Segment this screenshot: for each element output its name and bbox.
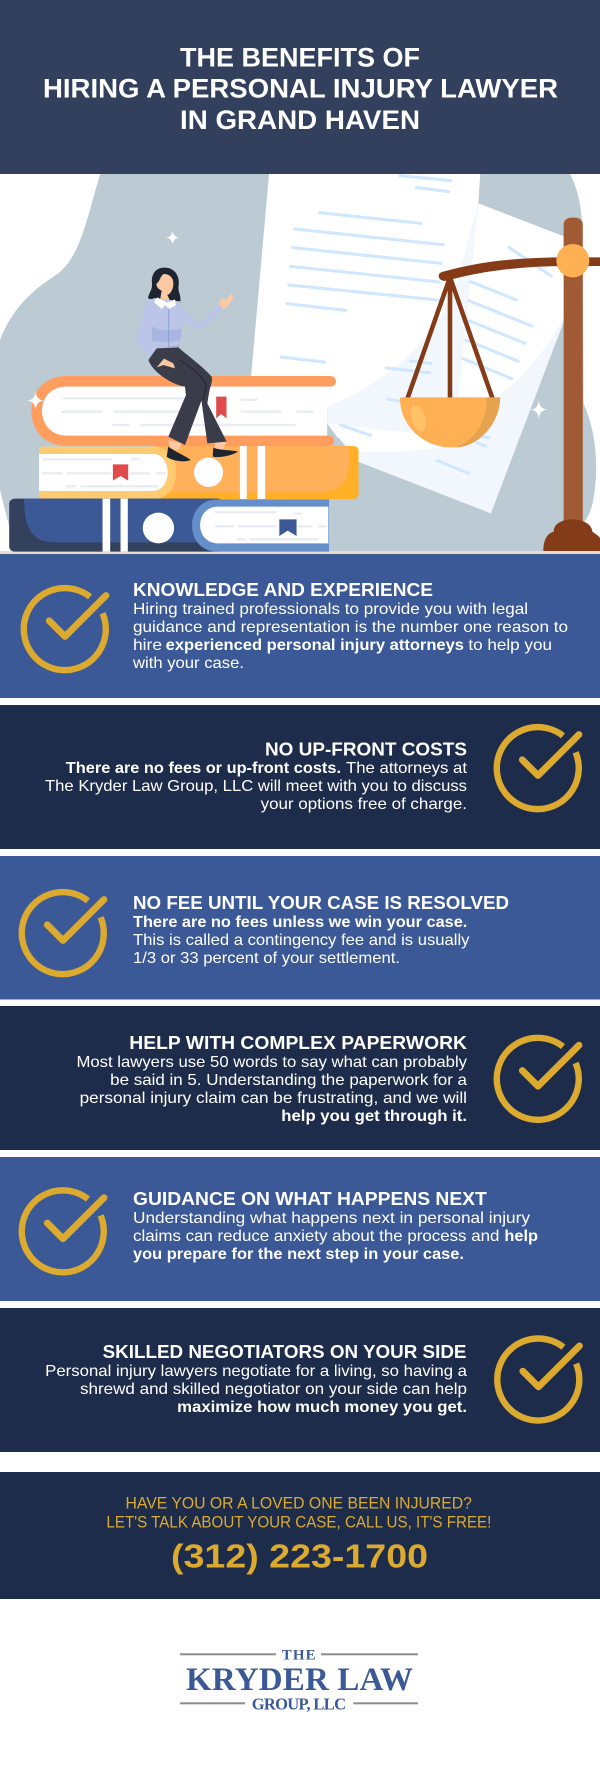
background blob bbox=[0, 174, 596, 551]
call to action text bbox=[106, 1494, 491, 1531]
body text: 1/3 or 33 percent of your settlement. bbox=[133, 950, 400, 967]
body text: claims can reduce anxiety about the process and bbox=[133, 1228, 499, 1245]
body text: you prepare for the next step in your case. bbox=[133, 1246, 464, 1263]
body text: hire bbox=[133, 637, 162, 654]
heading: KNOWLEDGE AND EXPERIENCE bbox=[133, 580, 433, 600]
logo: The Kryder Law Group, LLC: KRYDER LAW bbox=[186, 1662, 413, 1698]
panel: no fee until your case is resolved bbox=[0, 856, 600, 1000]
body text: There are no fees unless we win your case. bbox=[133, 914, 467, 931]
body text: to help you bbox=[468, 637, 552, 654]
panel: guidance on what happens next bbox=[0, 1157, 600, 1301]
icon: check mark bbox=[497, 727, 579, 809]
body text bbox=[133, 1210, 538, 1263]
title bbox=[43, 43, 558, 135]
paper: front sheet bbox=[249, 174, 480, 407]
book: bottom blue bbox=[9, 499, 329, 552]
body text: help you get through it. bbox=[281, 1108, 467, 1125]
body text: experienced personal injury attorneys bbox=[166, 637, 464, 654]
body text: guidance and representation is the number one reason to bbox=[133, 619, 568, 636]
body text bbox=[132, 601, 568, 672]
body text: The attorneys at bbox=[346, 760, 468, 777]
icon: check mark bbox=[22, 1190, 104, 1272]
body text: personal injury claim can be frustrating, and we will bbox=[80, 1090, 467, 1107]
body text: with your case. bbox=[132, 655, 244, 672]
icon: check mark bbox=[22, 892, 104, 974]
logo: The Kryder Law Group, LLC: GROUP, LLC bbox=[252, 1694, 346, 1713]
body text: your options free of charge. bbox=[261, 796, 467, 813]
woman sitting on books bbox=[136, 268, 238, 461]
illustration: books, woman, papers and scales bbox=[0, 174, 600, 554]
body text: be said in 5. Understanding the paperwork for a bbox=[110, 1072, 467, 1089]
body text bbox=[133, 914, 470, 967]
body text: Understanding what happens next in personal injury bbox=[133, 1210, 530, 1227]
heading: GUIDANCE ON WHAT HAPPENS NEXT bbox=[133, 1189, 487, 1209]
panel: help with complex paperwork bbox=[0, 1006, 600, 1150]
body text: The Kryder Law Group, LLC will meet with you to discuss bbox=[45, 778, 467, 795]
heading: NO UP-FRONT COSTS bbox=[265, 739, 467, 759]
body text bbox=[76, 1054, 467, 1125]
body text: Hiring trained professionals to provide you with legal bbox=[133, 601, 528, 618]
book: top orange bbox=[31, 376, 336, 446]
book: middle yellow bbox=[39, 446, 359, 499]
icon: check mark bbox=[24, 588, 106, 670]
body text: shrewd and skilled negotiator on your side can help bbox=[80, 1381, 467, 1398]
logo: The Kryder Law Group, LLC bbox=[180, 1647, 418, 1713]
heading: SKILLED NEGOTIATORS ON YOUR SIDE bbox=[103, 1342, 466, 1362]
header band bbox=[0, 0, 600, 174]
panel: skilled negotiators on your side bbox=[0, 1308, 600, 1452]
sparkles bbox=[27, 231, 547, 419]
body text: Most lawyers use 50 words to say what can probably bbox=[76, 1054, 467, 1071]
title: THE BENEFITS OF bbox=[180, 43, 420, 73]
body text: maximize how much money you get. bbox=[177, 1399, 467, 1416]
body text bbox=[45, 1363, 467, 1416]
panel: knowledge and experience bbox=[0, 554, 600, 698]
icon: check mark bbox=[497, 1339, 580, 1421]
body text: There are no fees or up-front costs. bbox=[66, 760, 341, 777]
logo: The Kryder Law Group, LLC: THE bbox=[282, 1647, 316, 1663]
icon: check mark bbox=[497, 1038, 579, 1120]
panel: no up-front costs bbox=[0, 705, 600, 849]
title: HIRING A PERSONAL INJURY LAWYER bbox=[43, 74, 558, 104]
body text: Personal injury lawyers negotiate for a living, so having a bbox=[45, 1363, 467, 1380]
title: IN GRAND HAVEN bbox=[180, 105, 420, 135]
call to action text: LET'S TALK ABOUT YOUR CASE, CALL US, IT'S FREE! bbox=[106, 1513, 491, 1531]
panel: call to action bbox=[0, 1472, 600, 1599]
scales of justice bbox=[400, 218, 600, 551]
body text: help bbox=[504, 1228, 538, 1245]
heading: HELP WITH COMPLEX PAPERWORK bbox=[129, 1033, 467, 1053]
call to action text: HAVE YOU OR A LOVED ONE BEEN INJURED? bbox=[126, 1494, 472, 1512]
body text: This is called a contingency fee and is usually bbox=[133, 932, 470, 949]
heading: NO FEE UNTIL YOUR CASE IS RESOLVED bbox=[133, 893, 509, 913]
paper: back sheet bbox=[327, 203, 564, 513]
body text bbox=[45, 760, 468, 813]
phone number: (312) 223-1700 bbox=[171, 1538, 428, 1575]
